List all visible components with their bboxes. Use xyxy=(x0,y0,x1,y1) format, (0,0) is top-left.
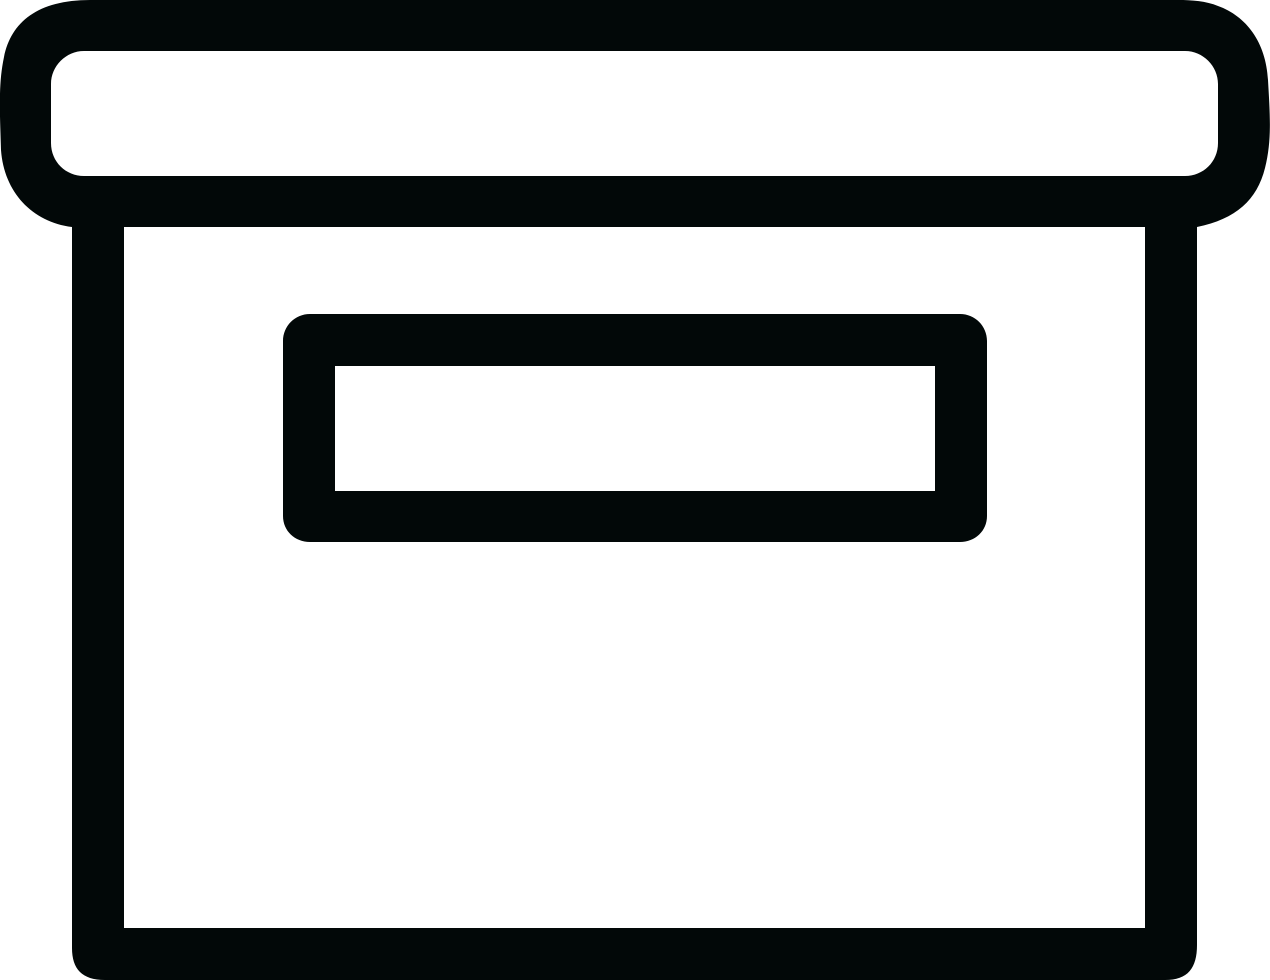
label slot xyxy=(283,314,987,542)
